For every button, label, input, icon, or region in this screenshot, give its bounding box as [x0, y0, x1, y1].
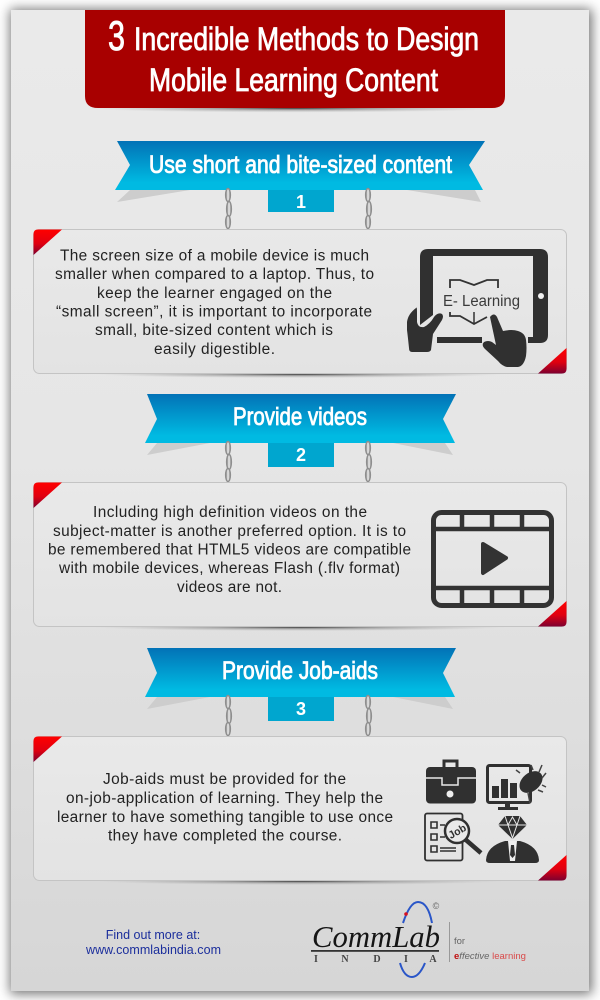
panel: job-aids [34, 736, 566, 889]
chain links 2 [226, 442, 371, 482]
icon: tablet with e-learning [407, 249, 548, 367]
logo: CommLab India: D [373, 954, 381, 965]
logo: CommLab India: N [341, 954, 349, 965]
footer contact text [85, 928, 221, 957]
panel: videos [34, 482, 566, 635]
body text 3: Job-aids must be provided for the [103, 771, 346, 788]
body text 2: videos are not. [177, 579, 282, 596]
icon: briefcase [426, 761, 476, 804]
icon: film strip with play button [433, 512, 552, 606]
body text 1: “small screen”, it is important to incorporate [56, 304, 372, 320]
number badge 2: 2 [296, 445, 306, 465]
body text 2: be remembered that HTML5 videos are compatible [48, 542, 411, 558]
panel: short content [34, 230, 566, 382]
footer contact text: www.commlabindia.com [85, 943, 221, 957]
icon: job search checklist [425, 814, 481, 860]
footer contact text: Find out more at: [106, 928, 200, 942]
logo: CommLab India: for [454, 936, 465, 947]
body text 2: Including high definition videos on the [93, 504, 367, 521]
chain links 3 [226, 696, 371, 736]
body text 3 [57, 771, 393, 844]
section 3 ribbon: Provide Job-aids [222, 657, 378, 685]
body text 3: learner to have something tangible to use once [57, 809, 393, 826]
logo: CommLab India: CommLab [312, 919, 440, 954]
icon: diamond head person [486, 816, 539, 863]
logo: CommLab India [311, 901, 526, 977]
body text 2 [48, 504, 411, 596]
title text: 3 [108, 12, 125, 59]
chain links 1 [226, 188, 371, 228]
body text 1: keep the learner engaged on the [97, 285, 332, 302]
title banner [85, 10, 505, 117]
body text 2: subject-matter is another preferred option. It is to [53, 523, 406, 540]
body text 1: easily digestible. [154, 341, 275, 358]
section 1 ribbon [115, 141, 485, 202]
icon: tablet with e-learning: E- Learning [443, 293, 520, 310]
body text 1 [55, 248, 374, 358]
icon: job search checklist: Job [446, 822, 469, 842]
number badge 1 [268, 190, 334, 212]
number badge 1: 1 [296, 192, 306, 212]
logo: CommLab India: I [404, 954, 408, 965]
number badge 3 [268, 697, 334, 721]
logo: CommLab India: © [433, 901, 440, 911]
logo: CommLab India: effective learning [454, 951, 526, 962]
logo: CommLab India: A [429, 954, 437, 965]
logo: CommLab India: I [314, 954, 318, 965]
icon: monitor with bug [488, 765, 547, 810]
section 1 ribbon: Use short and bite-sized content [149, 151, 452, 179]
body text 1: small, bite-sized content which is [95, 322, 333, 339]
number badge 3: 3 [296, 699, 306, 719]
body text 3: they have completed the course. [108, 828, 342, 844]
number badge 2 [268, 443, 334, 467]
section 3 ribbon [145, 648, 456, 709]
body text 1: smaller when compared to a laptop. Thus, to [55, 266, 374, 283]
body text 1: The screen size of a mobile device is much [60, 248, 369, 264]
title text: Incredible Methods to Design [134, 21, 479, 57]
section 2 ribbon: Provide videos [233, 403, 367, 431]
section 2 ribbon [145, 394, 456, 455]
title text: Mobile Learning Content [149, 62, 438, 98]
body text 2: with mobile devices, whereas Flash (.flv format) [58, 560, 400, 577]
title text [108, 12, 479, 98]
body text 3: on-job-application of learning. They help the [66, 790, 383, 807]
